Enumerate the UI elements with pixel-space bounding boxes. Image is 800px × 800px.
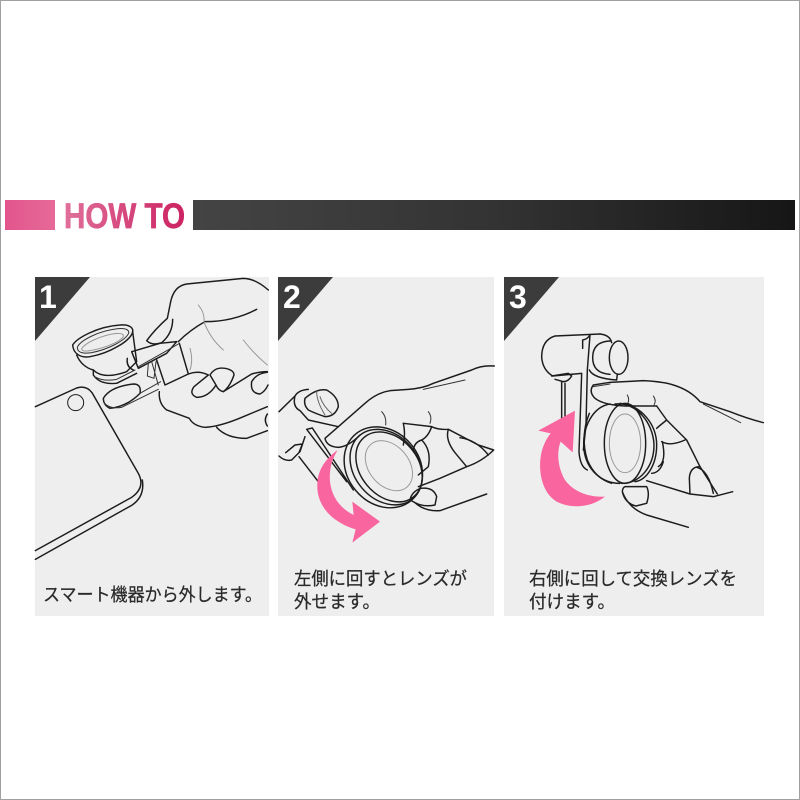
caption 3: 右側に回して交換レンズを (529, 569, 737, 589)
dark header bar (193, 200, 795, 230)
illustration: phone, clip lens and hand (35, 278, 268, 559)
panel 1 background (35, 277, 269, 616)
illustration: hand attaching lens (538, 334, 763, 527)
panel: step 1 (35, 277, 269, 616)
number badge 2: 2 (283, 279, 301, 315)
panel 3 background (504, 277, 764, 616)
caption 1: スマート機器から外します。 (43, 585, 262, 605)
caption 3 (529, 569, 737, 612)
panel: step 2 (278, 277, 494, 616)
number badge 3 (504, 277, 559, 341)
panel 2 background (278, 277, 494, 616)
panel: step 3 (504, 277, 764, 616)
caption 2: 外せます。 (294, 592, 380, 612)
number badge 1: 1 (39, 279, 57, 315)
caption 2: 左側に回すとレンズが (294, 569, 467, 589)
caption 3: 付けます。 (529, 592, 615, 612)
number badge 2 (278, 277, 333, 341)
pink header block (5, 200, 55, 230)
heading: HOW TO: HOW TO (64, 197, 185, 236)
caption 2 (294, 569, 467, 612)
number badge 3: 3 (509, 279, 527, 315)
pink arrow turning left (317, 450, 380, 543)
header banner (5, 197, 795, 236)
pink arrow turning right (538, 411, 605, 506)
number badge 1 (35, 277, 90, 341)
illustration: hand turning lens left (279, 366, 494, 543)
